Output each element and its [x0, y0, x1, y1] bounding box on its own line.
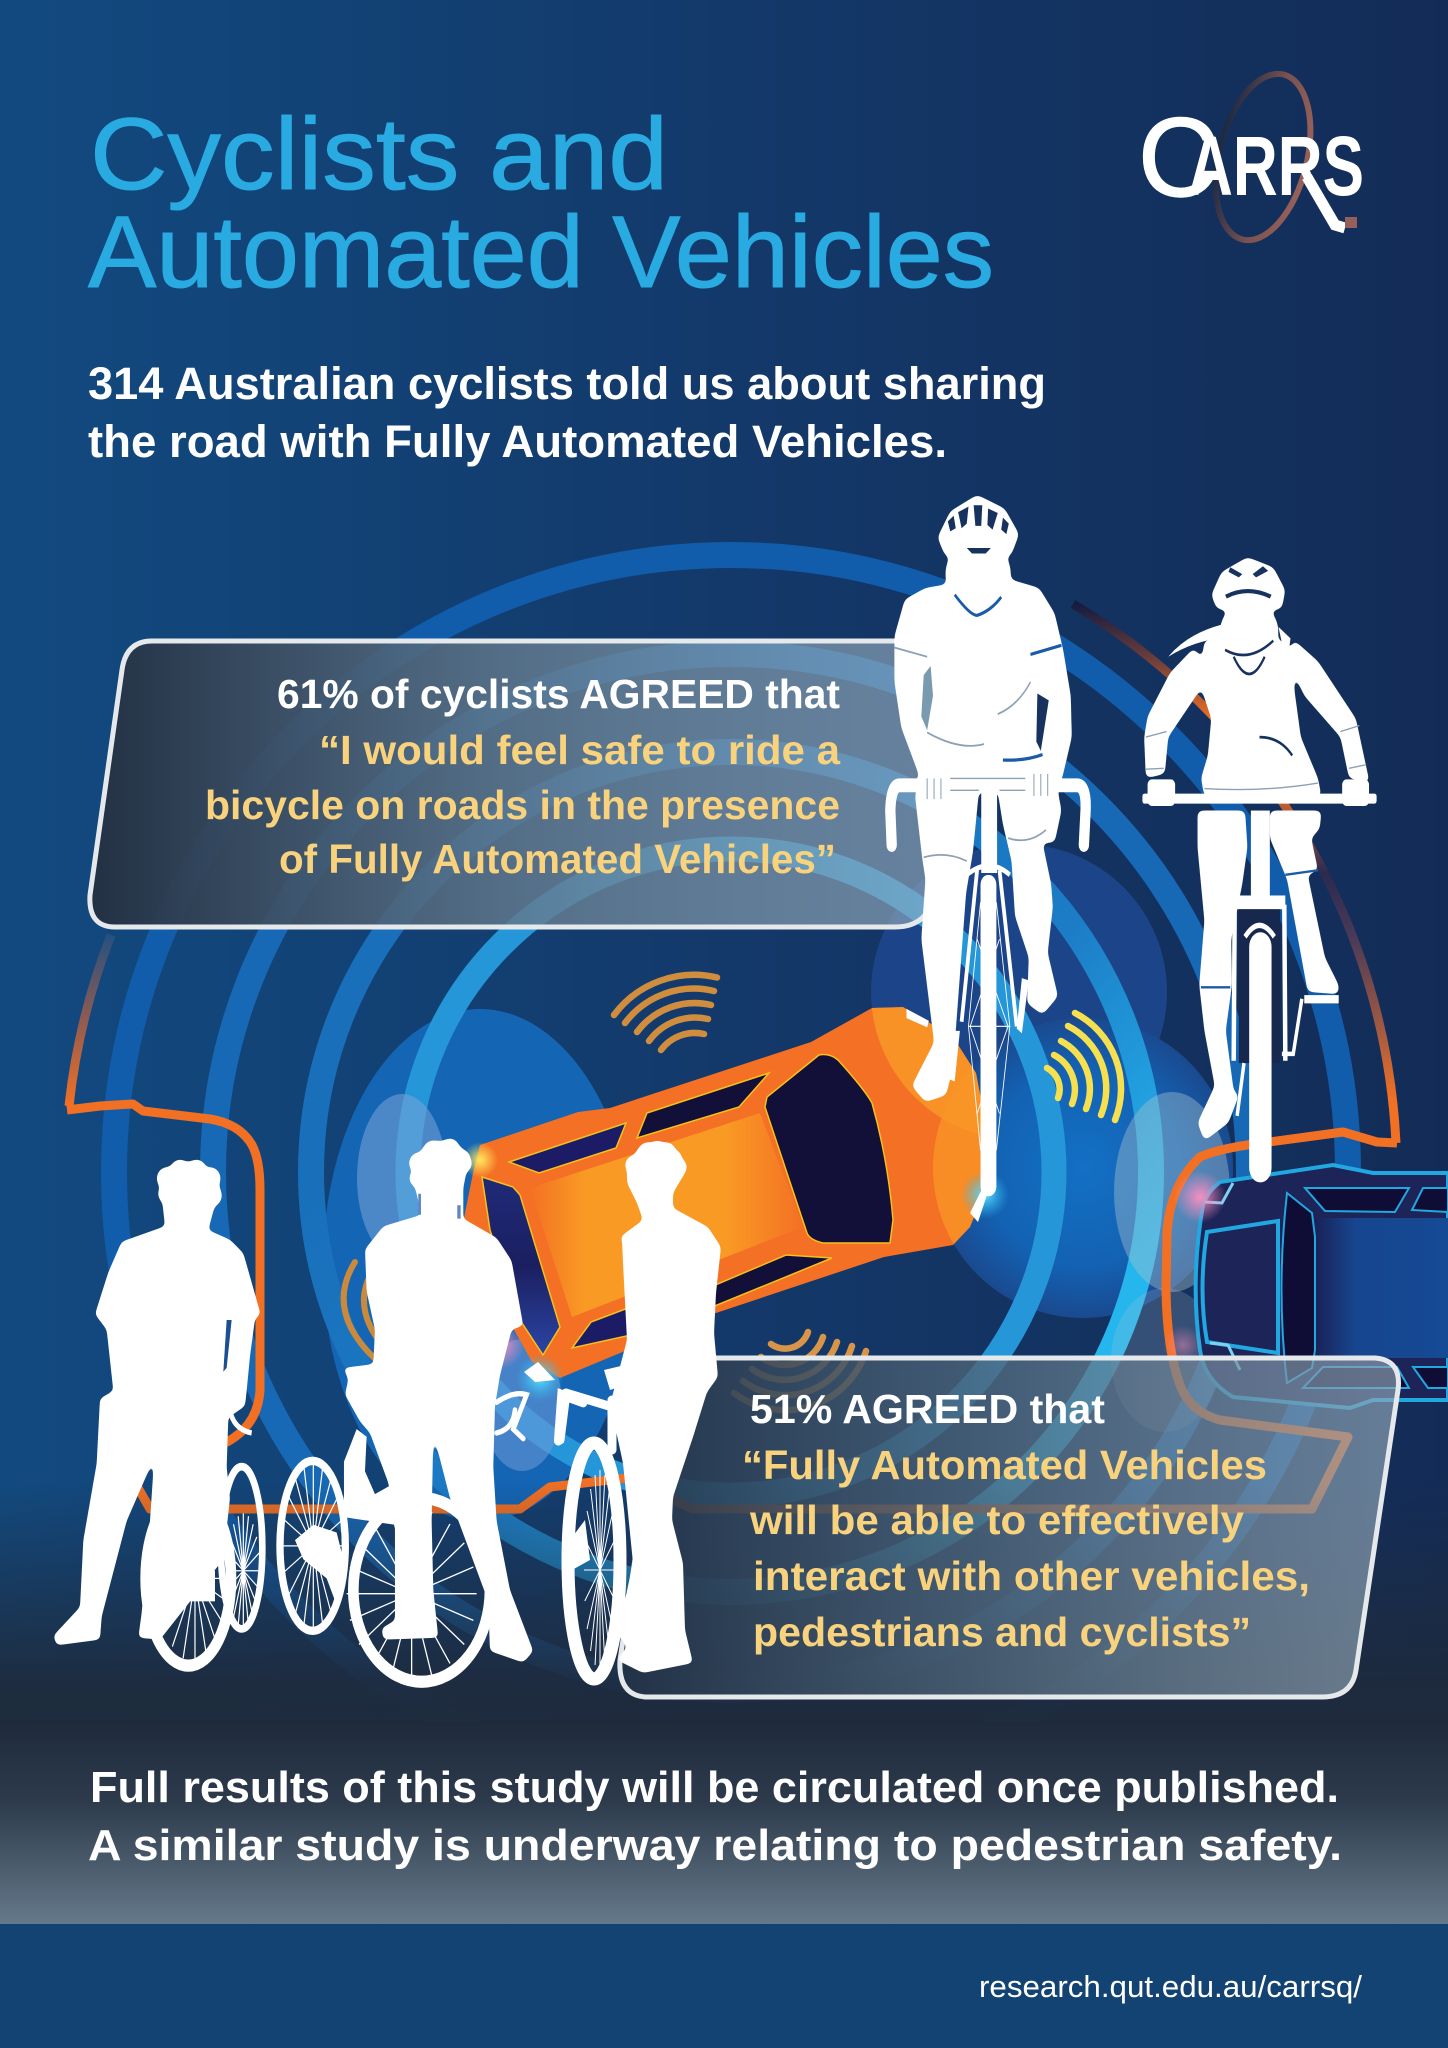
website link: research.qut.edu.au/carrsq/: [979, 1969, 1362, 2004]
title: Cyclists and: [90, 97, 668, 211]
panel: 61% agreed callout: 61% of cyclists AGREED that: [277, 671, 840, 717]
orange automated car: [464, 1007, 1007, 1398]
icon: wifi signal left: [344, 1262, 388, 1358]
intro text: [88, 358, 1046, 467]
panel: 61% agreed callout: of Fully Automated Vehicles”: [279, 836, 836, 882]
translucent highlight ellipses: [357, 1092, 1230, 1471]
bottom fade to dark: [0, 1480, 1448, 1924]
panel: 61% agreed callout: bicycle on roads in the presence: [205, 782, 840, 828]
closing note: A similar study is underway relating to pedestrian safety.: [88, 1821, 1342, 1870]
concentric signal rings: [114, 555, 1348, 1789]
closing note: Full results of this study will be circulated once published.: [90, 1763, 1339, 1812]
panel: 51% agreed callout: pedestrians and cyclists”: [753, 1609, 1251, 1655]
logo: CARRS: ARRS: [1188, 119, 1364, 213]
intro text: 314 Australian cyclists told us about sharing: [88, 358, 1046, 409]
orange road outline: [67, 604, 1397, 1509]
sensor circles behind rings: [323, 844, 1233, 1521]
panel: 51% agreed callout: interact with other vehicles,: [753, 1553, 1310, 1599]
panel: 51% agreed callout: 51% AGREED that: [750, 1386, 1105, 1432]
panel: 61% agreed callout: “I would feel safe to ride a: [319, 727, 841, 773]
title: Automated Vehicles: [88, 195, 994, 309]
panel: 51% agreed callout: [620, 1358, 1399, 1697]
cyclist silhouette with bike: left: [53, 1159, 262, 1666]
closing note: [88, 1763, 1342, 1870]
panel: 61% agreed callout: [90, 641, 965, 927]
icon: wifi signal yellow: [1047, 1013, 1121, 1120]
cyclist silhouette with bike: centre: [280, 1138, 583, 1682]
rider: woman on mountain bike: [1142, 557, 1377, 1182]
icon: wifi signal lower: [734, 1332, 866, 1410]
panel: 51% agreed callout: “Fully Automated Vehicles: [742, 1442, 1267, 1488]
logo: CARRS: [1138, 64, 1364, 250]
dark automated car at right: [1163, 1165, 1448, 1408]
logo: CARRS: C: [1138, 95, 1218, 220]
title: [88, 97, 994, 309]
footer bar: [0, 1924, 1448, 2048]
cyclist silhouette with bike: right: [560, 1140, 721, 1679]
icon: wifi signal top: [614, 975, 717, 1050]
panel: 51% agreed callout: will be able to effectively: [749, 1497, 1244, 1543]
intro text: the road with Fully Automated Vehicles.: [88, 416, 947, 467]
rider: man on road bike: [890, 495, 1086, 1196]
